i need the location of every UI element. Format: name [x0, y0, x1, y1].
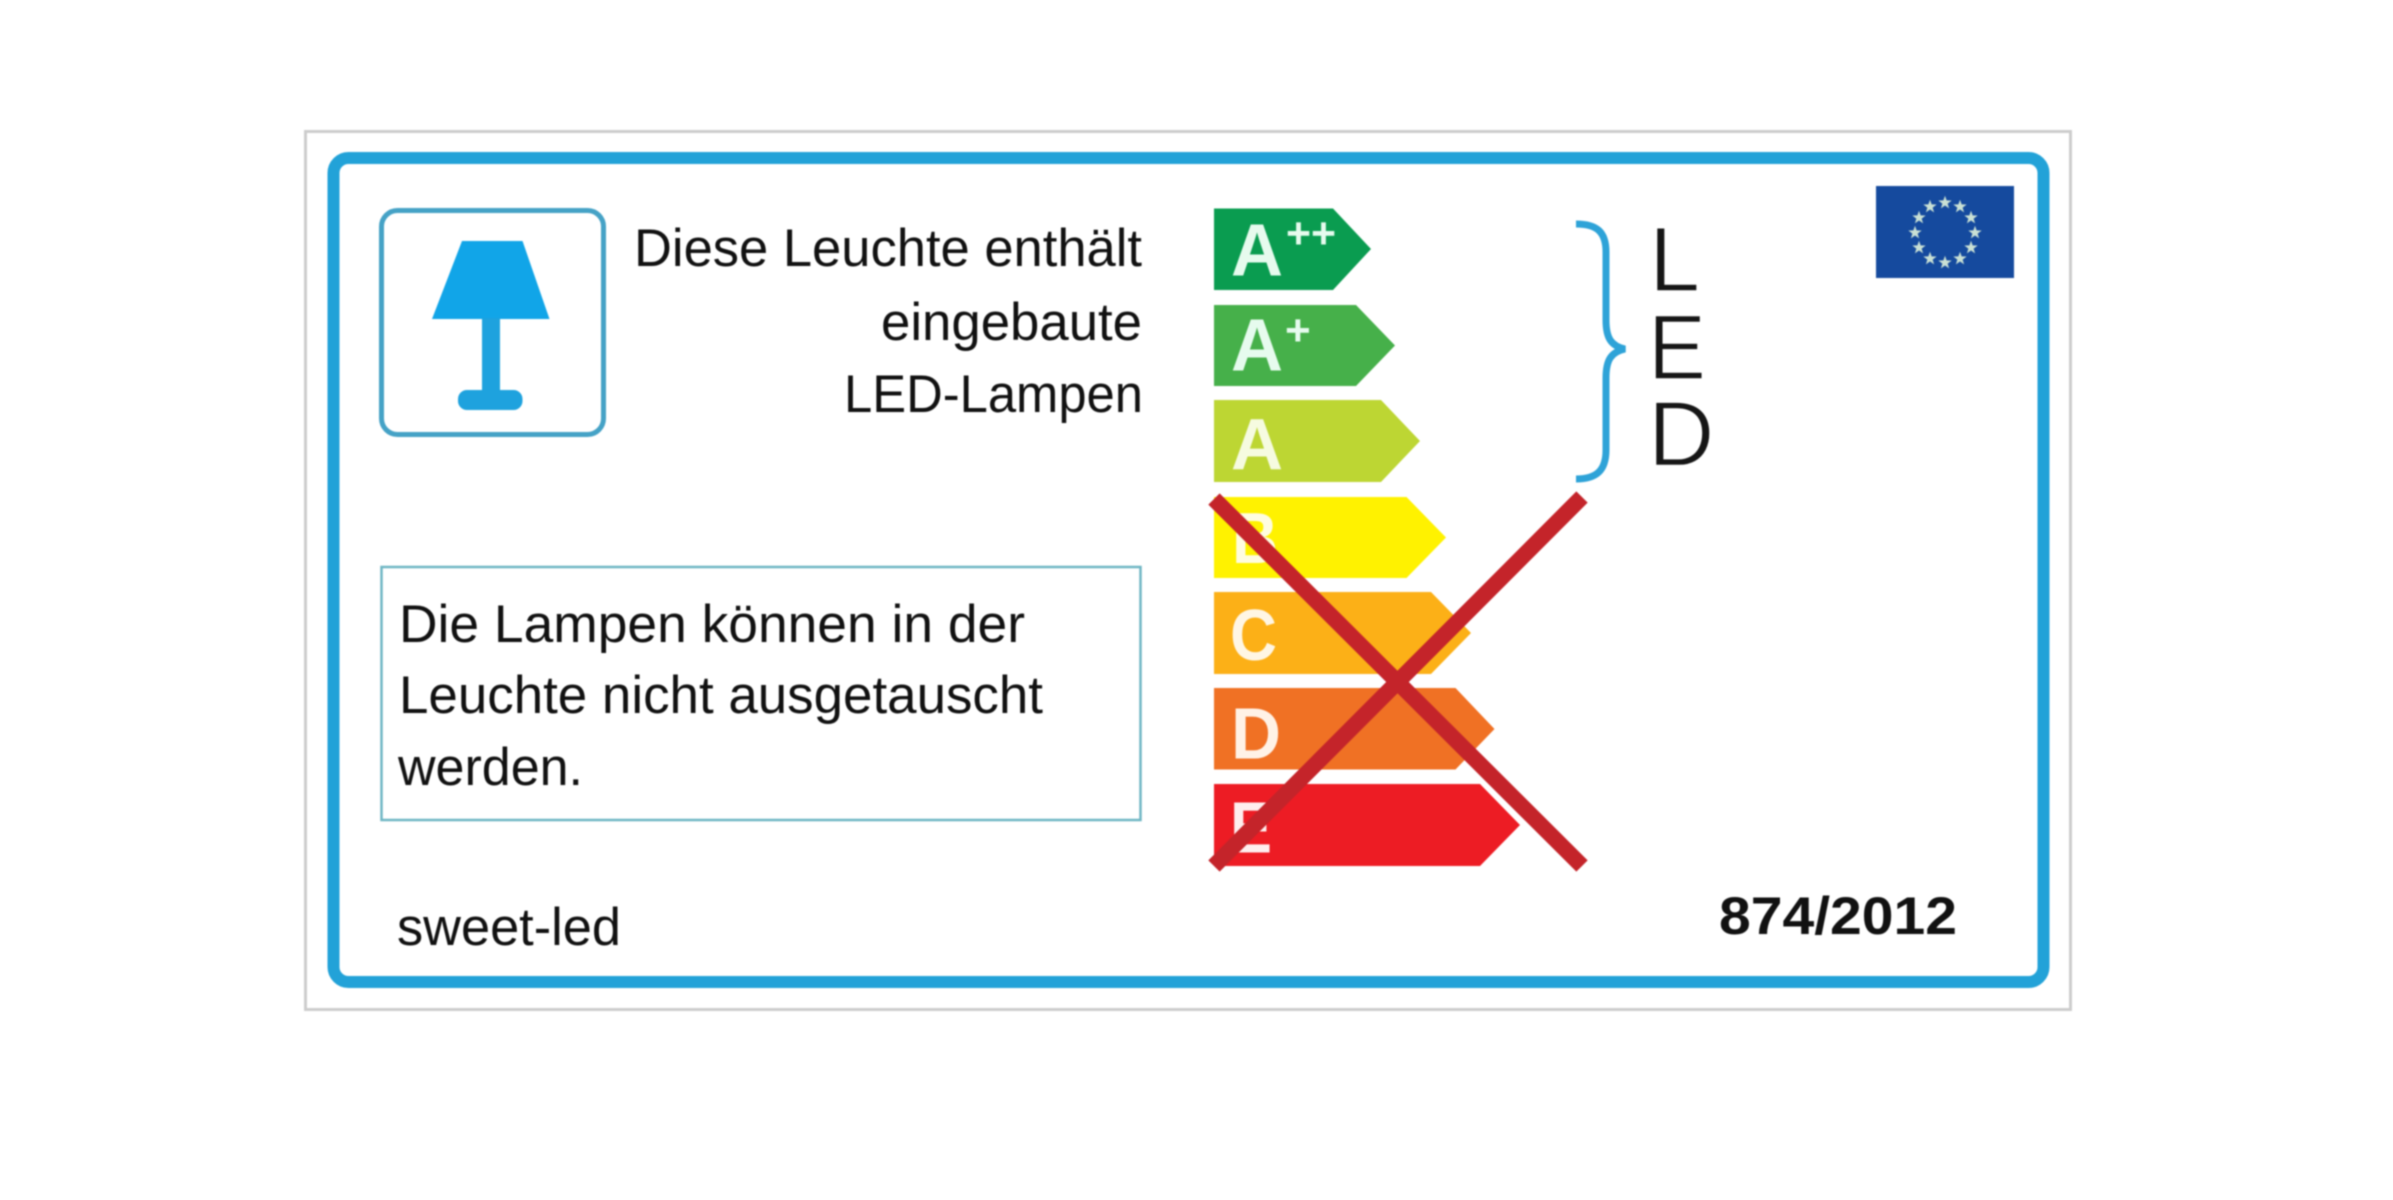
- heading: lamp statement: [634, 219, 1143, 424]
- LED vertical label: D: [1648, 384, 1714, 486]
- curly brace grouping LED classes: [1576, 224, 1625, 479]
- panel: replacement note: [382, 567, 1140, 820]
- arrow: class D: [1214, 688, 1494, 774]
- arrow: class B: B: [1232, 499, 1278, 579]
- arrow: class E: [1214, 784, 1520, 868]
- arrow: class C: C: [1230, 596, 1277, 676]
- blue rounded label border: [334, 158, 2044, 982]
- panel: replacement note: Die Lampen können in der: [399, 595, 1025, 654]
- LED vertical label: E: [1648, 297, 1706, 399]
- regulation number: 874/2012: [1719, 887, 1957, 946]
- arrow: class A: [1214, 400, 1420, 485]
- icon: table lamp in rounded box: [382, 210, 604, 434]
- arrow: class A+: A: [1231, 304, 1283, 386]
- arrow: class B: [1214, 497, 1446, 579]
- arrow: class A++: [1214, 208, 1371, 292]
- LED vertical label: L: [1649, 209, 1700, 311]
- icon: EU flag: [1876, 186, 2014, 278]
- LED vertical label: [1648, 209, 1714, 486]
- arrow: class A: A: [1231, 405, 1283, 485]
- heading: lamp statement: eingebaute: [881, 293, 1142, 352]
- heading: lamp statement: LED-Lampen: [844, 365, 1143, 424]
- red cross over classes B to E: [1214, 497, 1582, 866]
- energy class scale: [1214, 208, 1520, 868]
- arrow: class A++: A: [1231, 208, 1283, 292]
- heading: lamp statement: Diese Leuchte enthält: [634, 219, 1142, 278]
- arrow: class D: D: [1231, 694, 1281, 774]
- arrow: class E: E: [1230, 788, 1272, 868]
- outer grey frame: [306, 132, 2070, 1010]
- arrow: class C: [1214, 592, 1471, 676]
- supplier name: sweet-led: [397, 898, 621, 957]
- arrow: class A++: ++: [1286, 209, 1336, 258]
- arrow: class A+: [1214, 304, 1395, 386]
- arrow: class A+: +: [1285, 306, 1311, 355]
- panel: replacement note: Leuchte nicht ausgetauscht: [399, 666, 1043, 725]
- panel: replacement note: werden.: [397, 738, 583, 797]
